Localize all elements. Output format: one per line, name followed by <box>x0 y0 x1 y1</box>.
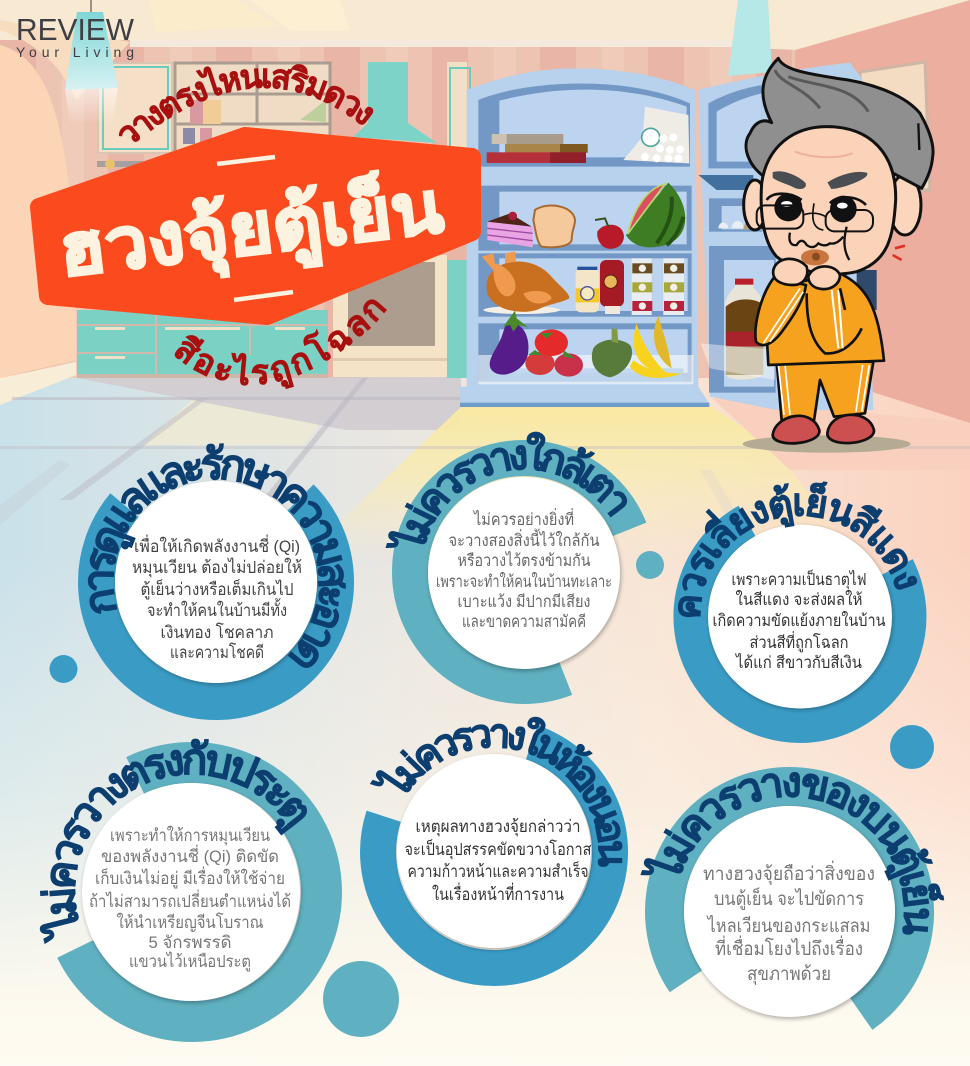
ring <box>97 498 336 702</box>
body text: ความก้าวหน้าและความสำเร็จ <box>408 860 588 881</box>
ring heading: การดูแลและรักษาความสะอาด <box>88 443 346 668</box>
body text: จะเป็นอุปสรรคขัดขวางโอกาส <box>404 838 592 860</box>
body text: เก็บเงินไม่อยู่ มีเรื่องให้ใช้จ่าย <box>95 866 285 889</box>
body text: ในสีแดง จะส่งผลให้ <box>736 590 862 609</box>
title banner <box>39 136 472 316</box>
white disc <box>684 806 896 1019</box>
body text: ถ้าไม่สามารถเปลี่ยนตำแหน่งได้ <box>89 889 291 911</box>
floor and lower background gradient <box>0 362 970 1066</box>
panel: avoid red fridge <box>673 481 926 743</box>
white disc <box>82 783 301 1003</box>
ring heading: ควรเลี่ยงตู้เย็นสีแดง <box>678 481 918 618</box>
decorative dot 3 <box>890 725 934 769</box>
fridge door <box>698 63 877 410</box>
body text: เกิดความขัดแย้งภายในบ้าน <box>712 611 886 630</box>
second compartment <box>478 186 692 251</box>
ring <box>691 521 909 725</box>
body text: หรือวางไว้ตรงข้ามกัน <box>458 551 590 570</box>
bananas <box>630 316 682 378</box>
bottle <box>725 279 763 380</box>
body text: บนตู้เย็น จะไปขัดการ <box>714 886 864 910</box>
jars <box>632 258 684 315</box>
top compartment <box>478 84 690 167</box>
body text: ทางฮวงจุ้ยถือว่าสิ่งของ <box>703 860 875 886</box>
decorative dot 2 <box>636 551 664 579</box>
body text: เพราะความเป็นธาตุไฟ <box>732 569 866 590</box>
cake <box>487 212 533 247</box>
trousers <box>777 362 873 421</box>
green pepper <box>592 328 632 377</box>
right wall <box>735 0 970 423</box>
illustration: old man eating a cookie <box>743 58 933 453</box>
body text: เพื่อให้เกิดพลังงานชี่ (Qi) <box>134 534 300 556</box>
body text: สุขภาพด้วย <box>747 964 831 986</box>
ring <box>665 786 915 1014</box>
body text: และความโชคดี <box>170 642 264 662</box>
ears <box>744 175 921 235</box>
kitchen cabinets, hood and oven <box>77 62 470 378</box>
body text: หมุนเวียน ต้องไม่ปล่อยให้ <box>132 557 302 578</box>
bottom compartment <box>478 323 693 384</box>
watermelon <box>626 183 685 247</box>
illustration: open refrigerator <box>460 63 877 410</box>
logo: REVIEW <box>16 12 135 47</box>
third compartment <box>478 253 692 317</box>
shoes <box>773 415 874 443</box>
mayonnaise jar <box>576 267 599 312</box>
body text: แขวนไว้เหนือประตู <box>129 951 251 972</box>
body text: เพราะจะทำให้คนในบ้านทะเลาะ <box>436 572 612 591</box>
ring <box>410 458 630 686</box>
fridge body <box>460 68 709 407</box>
bag of ice <box>623 107 689 163</box>
sweater <box>755 273 884 365</box>
apple <box>595 218 624 249</box>
body text <box>132 534 302 662</box>
body text: ที่เชื่อมโยงไปถึงเรื่อง <box>715 935 863 960</box>
eggplant <box>490 311 528 375</box>
ceiling lamp right <box>728 0 772 76</box>
body text: ส่วนสีที่ถูกโฉลก <box>750 631 848 653</box>
ring heading: ไม่ควรวางของบนตู้เย็น <box>640 772 944 935</box>
main title: ฮวงจุ้ยตู้เย็น <box>54 163 448 297</box>
ring heading: ไม่ควรวางใกล้เตา <box>386 432 628 548</box>
books <box>487 134 588 163</box>
tomatoes <box>525 329 583 377</box>
roast chicken <box>482 252 569 314</box>
body text: ได้แก่ สีขาวกับสีเงิน <box>734 653 862 672</box>
white disc <box>397 754 592 950</box>
body text: ของพลังงานชี่ (Qi) ติดขัด <box>101 844 279 866</box>
ring heading: ไม่ควรวางในห้องนอน <box>370 716 622 867</box>
curved heading top: วางตรงไหนเสริมดวง <box>118 64 374 142</box>
body text: จะทำให้คนในบ้านมีทั้ง <box>147 598 287 620</box>
motion marks <box>893 246 905 260</box>
body text: ไหลเวียนของกระแสลม <box>706 915 870 937</box>
body text: ในเรื่องหน้าที่การงาน <box>432 882 564 904</box>
panel: not in the bedroom <box>360 716 628 986</box>
panel: care and cleanliness <box>78 443 354 720</box>
ring heading: ไม่ควรวางตรงกับประตู <box>40 738 307 944</box>
body text <box>712 569 886 672</box>
ring <box>76 762 321 1021</box>
body text: ให้นำเหรียญจีนโบราณ <box>116 912 264 932</box>
body text: เพราะทำให้การหมุนเวียน <box>110 825 270 846</box>
ceiling lamp left <box>65 0 118 125</box>
curved heading bottom: สีอะไรถูกโฉลก <box>174 299 387 390</box>
face <box>757 127 896 274</box>
logo: Your Living <box>16 44 134 60</box>
body text: 5 จักรพรรดิ <box>148 933 232 952</box>
hands <box>773 259 840 289</box>
body text <box>703 860 875 986</box>
body text: เบาะแว้ง มีปากมีเสียง <box>458 593 590 611</box>
panel: not opposite the door <box>40 738 342 1042</box>
body text: เหตุผลทางฮวงจุ้ยกล่าวว่า <box>416 817 580 837</box>
body text <box>89 825 291 972</box>
panel: not near the stove <box>386 432 646 704</box>
ring <box>378 742 610 968</box>
panel: nothing on top of the fridge <box>640 767 944 1030</box>
body text: ตู้เย็นว่างหรือเต็มเกินไป <box>140 578 294 600</box>
body text: จะวางสองสิ่งนี้ไว้ใกล้กัน <box>448 528 600 550</box>
ketchup bottle <box>600 260 624 314</box>
white disc <box>115 481 318 685</box>
hair <box>746 58 933 188</box>
floor shadow <box>743 435 911 453</box>
body text: ไม่ควรอย่างยิ่งที่ <box>472 508 574 529</box>
decorative dot 1 <box>50 655 78 683</box>
white disc <box>708 524 893 710</box>
decorative dot 4 <box>323 961 399 1037</box>
body text <box>436 508 612 631</box>
white disc <box>428 477 621 671</box>
body text: และขาดความสามัคคี <box>462 613 586 631</box>
body text: เงินทอง โชคลาภ <box>160 622 274 642</box>
body text <box>404 817 592 904</box>
bread <box>533 206 575 247</box>
